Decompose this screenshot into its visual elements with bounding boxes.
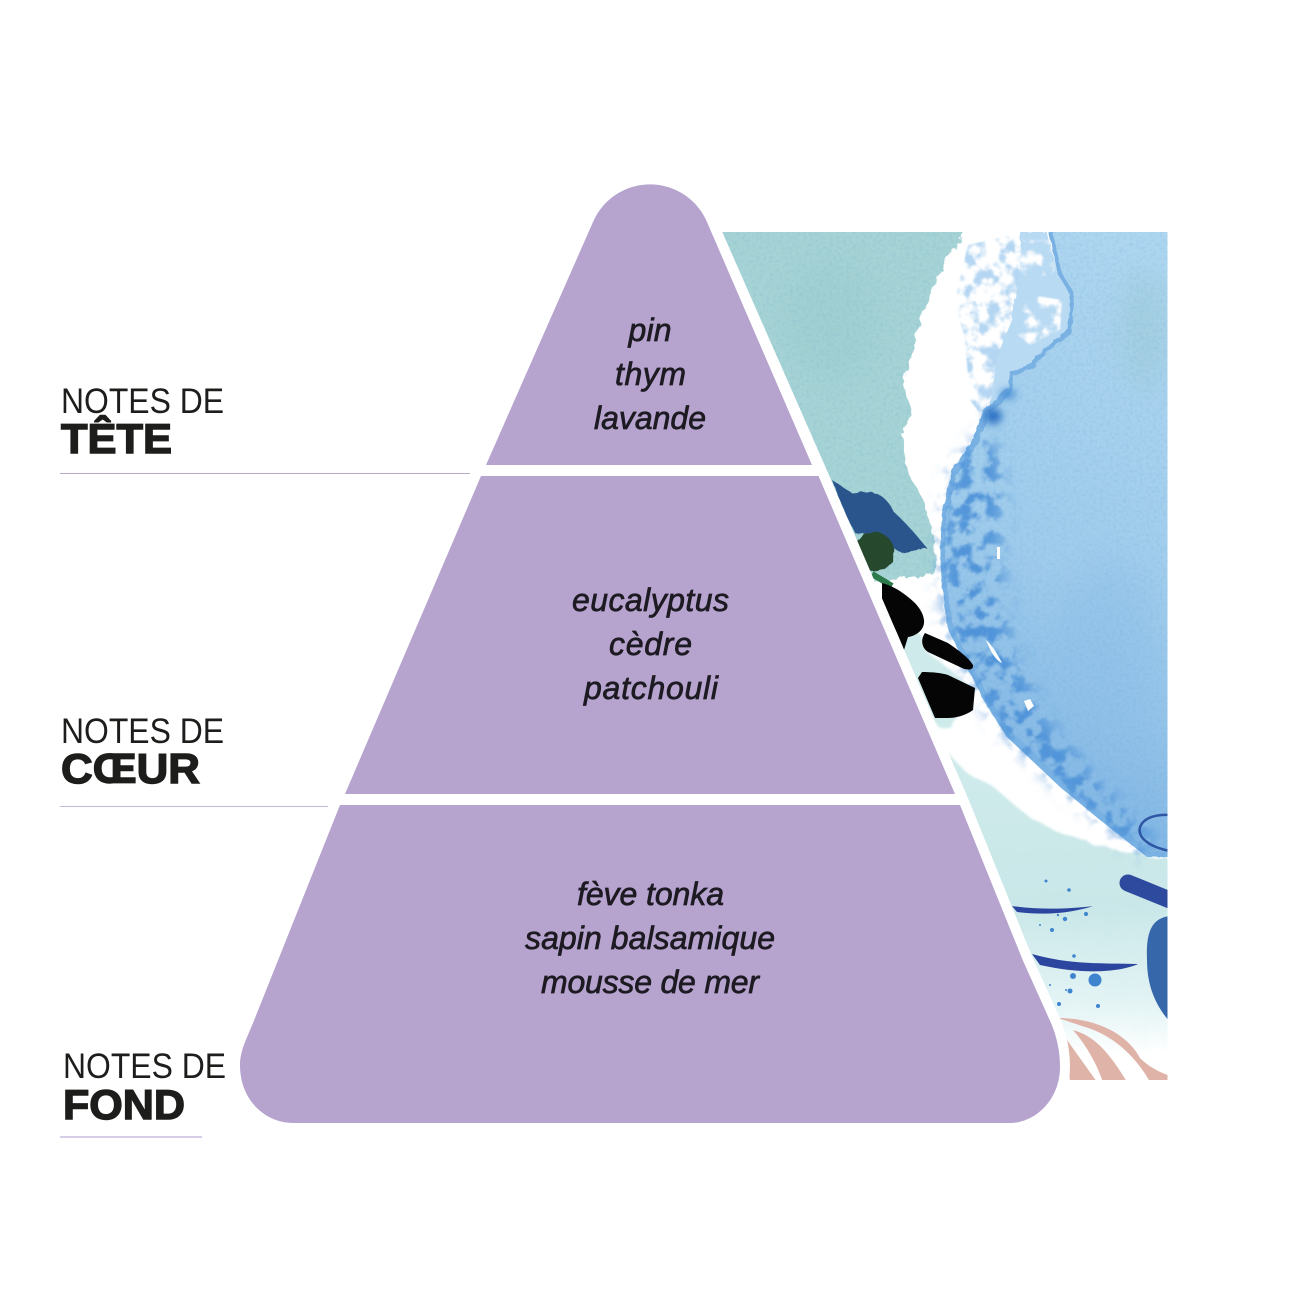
leader line: cœur — [60, 806, 328, 807]
label: notes de tête: TÊTE — [61, 414, 172, 462]
pink arcs — [1058, 1018, 1170, 1082]
label: notes de fond — [63, 1047, 226, 1128]
fat blue stroke — [1128, 883, 1170, 900]
navy leaf — [832, 480, 927, 553]
base notes list: fève tonka — [577, 876, 724, 912]
label: notes de tête — [61, 382, 224, 462]
pyramid white halo — [240, 184, 1060, 1123]
green leaf — [854, 532, 894, 572]
label: notes de cœur: CŒUR — [61, 745, 200, 792]
label: notes de fond: FOND — [63, 1081, 185, 1128]
watercolor illustration — [700, 225, 1175, 1082]
leader line: tête — [60, 473, 470, 474]
label: notes de cœur — [61, 712, 224, 792]
top notes list — [594, 312, 706, 436]
heart notes list — [572, 582, 729, 706]
pyramid tier: heart — [345, 476, 955, 794]
dark blue pooling — [984, 389, 1016, 424]
green stem — [872, 574, 892, 586]
pale teal wash — [948, 752, 1168, 1043]
teal shading — [785, 260, 875, 380]
heart notes list: eucalyptus — [572, 582, 729, 618]
top notes list: thym — [615, 356, 686, 392]
blue wash edge — [940, 225, 1175, 857]
ring outline — [1140, 815, 1170, 851]
top notes list: pin — [628, 312, 672, 348]
top notes list: lavande — [594, 400, 706, 436]
pyramid tier: top — [486, 184, 812, 465]
white slivers — [986, 547, 1034, 711]
heart notes list: cèdre — [609, 626, 692, 662]
heart notes list: patchouli — [583, 670, 719, 706]
white dapples on wash — [1012, 240, 1062, 345]
pale teal patch between blobs — [896, 631, 976, 730]
blue wash — [945, 225, 1175, 852]
base notes list: mousse de mer — [541, 964, 760, 1000]
label: notes de cœur: NOTES DE — [61, 712, 224, 751]
label: notes de tête: NOTES DE — [61, 382, 224, 421]
base notes list — [525, 876, 775, 1000]
light blue wash patch — [990, 232, 1070, 405]
pyramid tier: base — [240, 805, 1060, 1123]
blue shading — [1060, 560, 1160, 720]
label: notes de fond: NOTES DE — [63, 1047, 226, 1086]
navy brush strokes — [1012, 906, 1138, 971]
base notes list: sapin balsamique — [525, 920, 775, 956]
mottled darker blue near edge — [940, 430, 1155, 856]
leader line: fond — [60, 1136, 202, 1138]
splatter dots — [1039, 880, 1102, 1008]
black blobs — [882, 583, 975, 718]
paper grain — [700, 232, 1168, 872]
teal wash — [722, 232, 962, 582]
dappled light blue patch left — [956, 236, 1021, 414]
dark blue petal — [1146, 916, 1168, 1019]
